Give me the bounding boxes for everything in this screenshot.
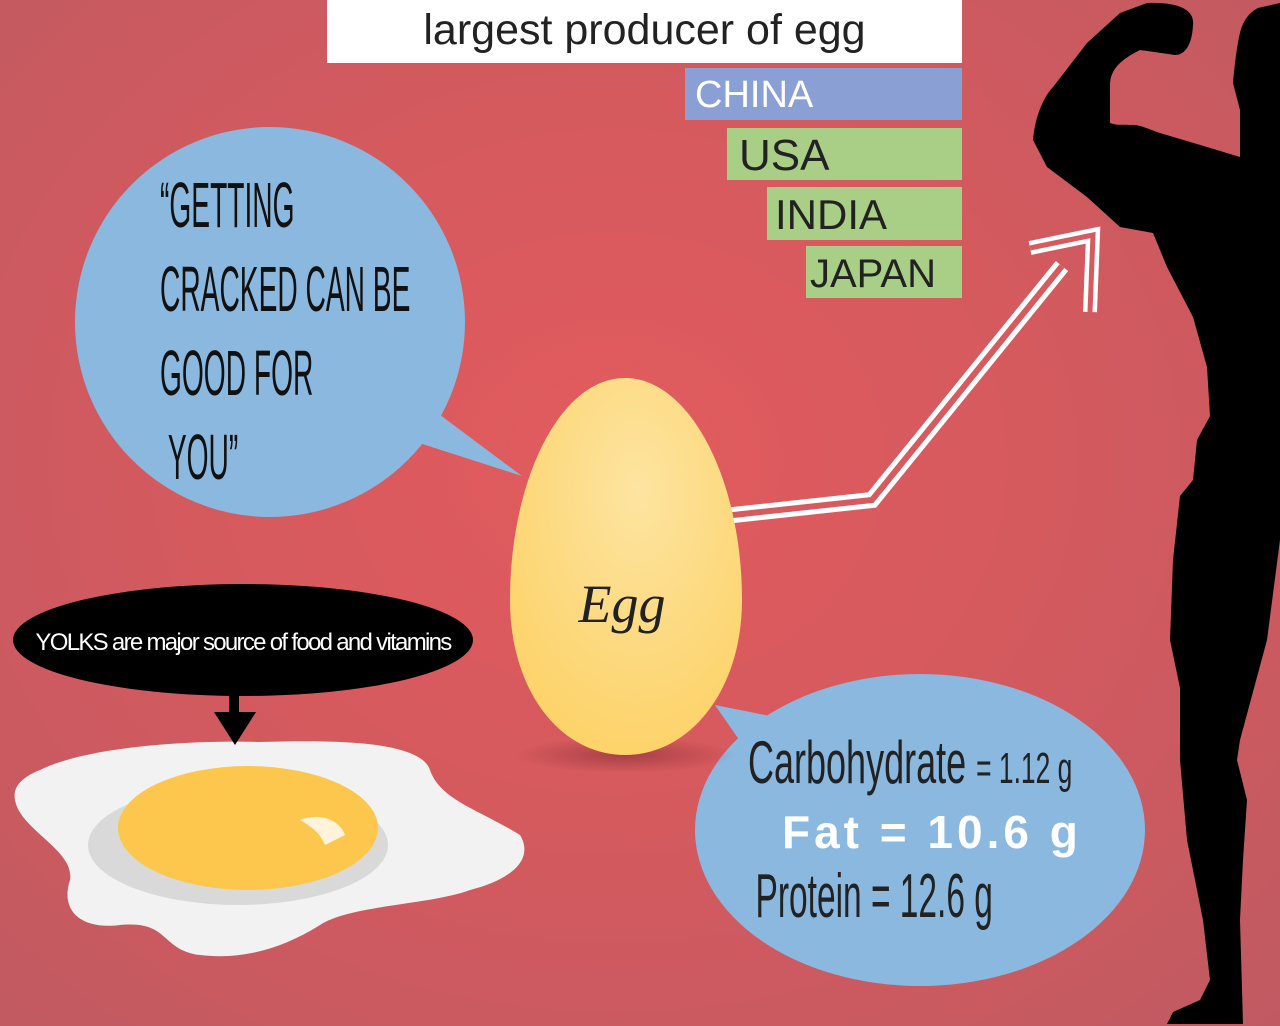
nutrition bubble bbox=[695, 674, 1145, 986]
fried egg bbox=[15, 741, 524, 956]
bar: China bbox=[685, 68, 962, 120]
bar: Japan bbox=[806, 246, 962, 298]
bar: USA: USA bbox=[739, 131, 829, 180]
silhouette: bodybuilder bbox=[1033, 3, 1280, 1024]
arrow: rising bbox=[724, 235, 1093, 516]
nutrition text: Carbohydrate = 1.12 g bbox=[748, 729, 1072, 796]
quote text: CRACKED CAN BE bbox=[160, 253, 410, 325]
nutrition text: Protein = 12.6 g bbox=[756, 862, 993, 931]
nutrition text: Fat = 10.6 g bbox=[782, 806, 1082, 858]
egg bbox=[510, 378, 742, 773]
bar: India: INDIA bbox=[775, 191, 887, 238]
bar: India bbox=[767, 187, 962, 240]
quote text: GOOD FOR bbox=[160, 337, 313, 409]
nutrition text bbox=[748, 729, 1082, 931]
title bbox=[327, 0, 962, 63]
speech bubble: quote bbox=[75, 127, 522, 517]
illustration svg: Egg bbox=[578, 574, 666, 634]
bar: USA bbox=[727, 128, 962, 180]
quote text: YOU” bbox=[168, 421, 238, 493]
bar: China: CHINA bbox=[695, 74, 813, 116]
quote text: “GETTING bbox=[160, 169, 295, 241]
black callout with arrow bbox=[13, 584, 473, 745]
quote text bbox=[160, 169, 410, 493]
title: largest producer of egg bbox=[423, 6, 866, 54]
bar: Japan: JAPAN bbox=[810, 252, 936, 296]
illustration svg: YOLKS are major source of food and vitamins bbox=[35, 629, 452, 656]
